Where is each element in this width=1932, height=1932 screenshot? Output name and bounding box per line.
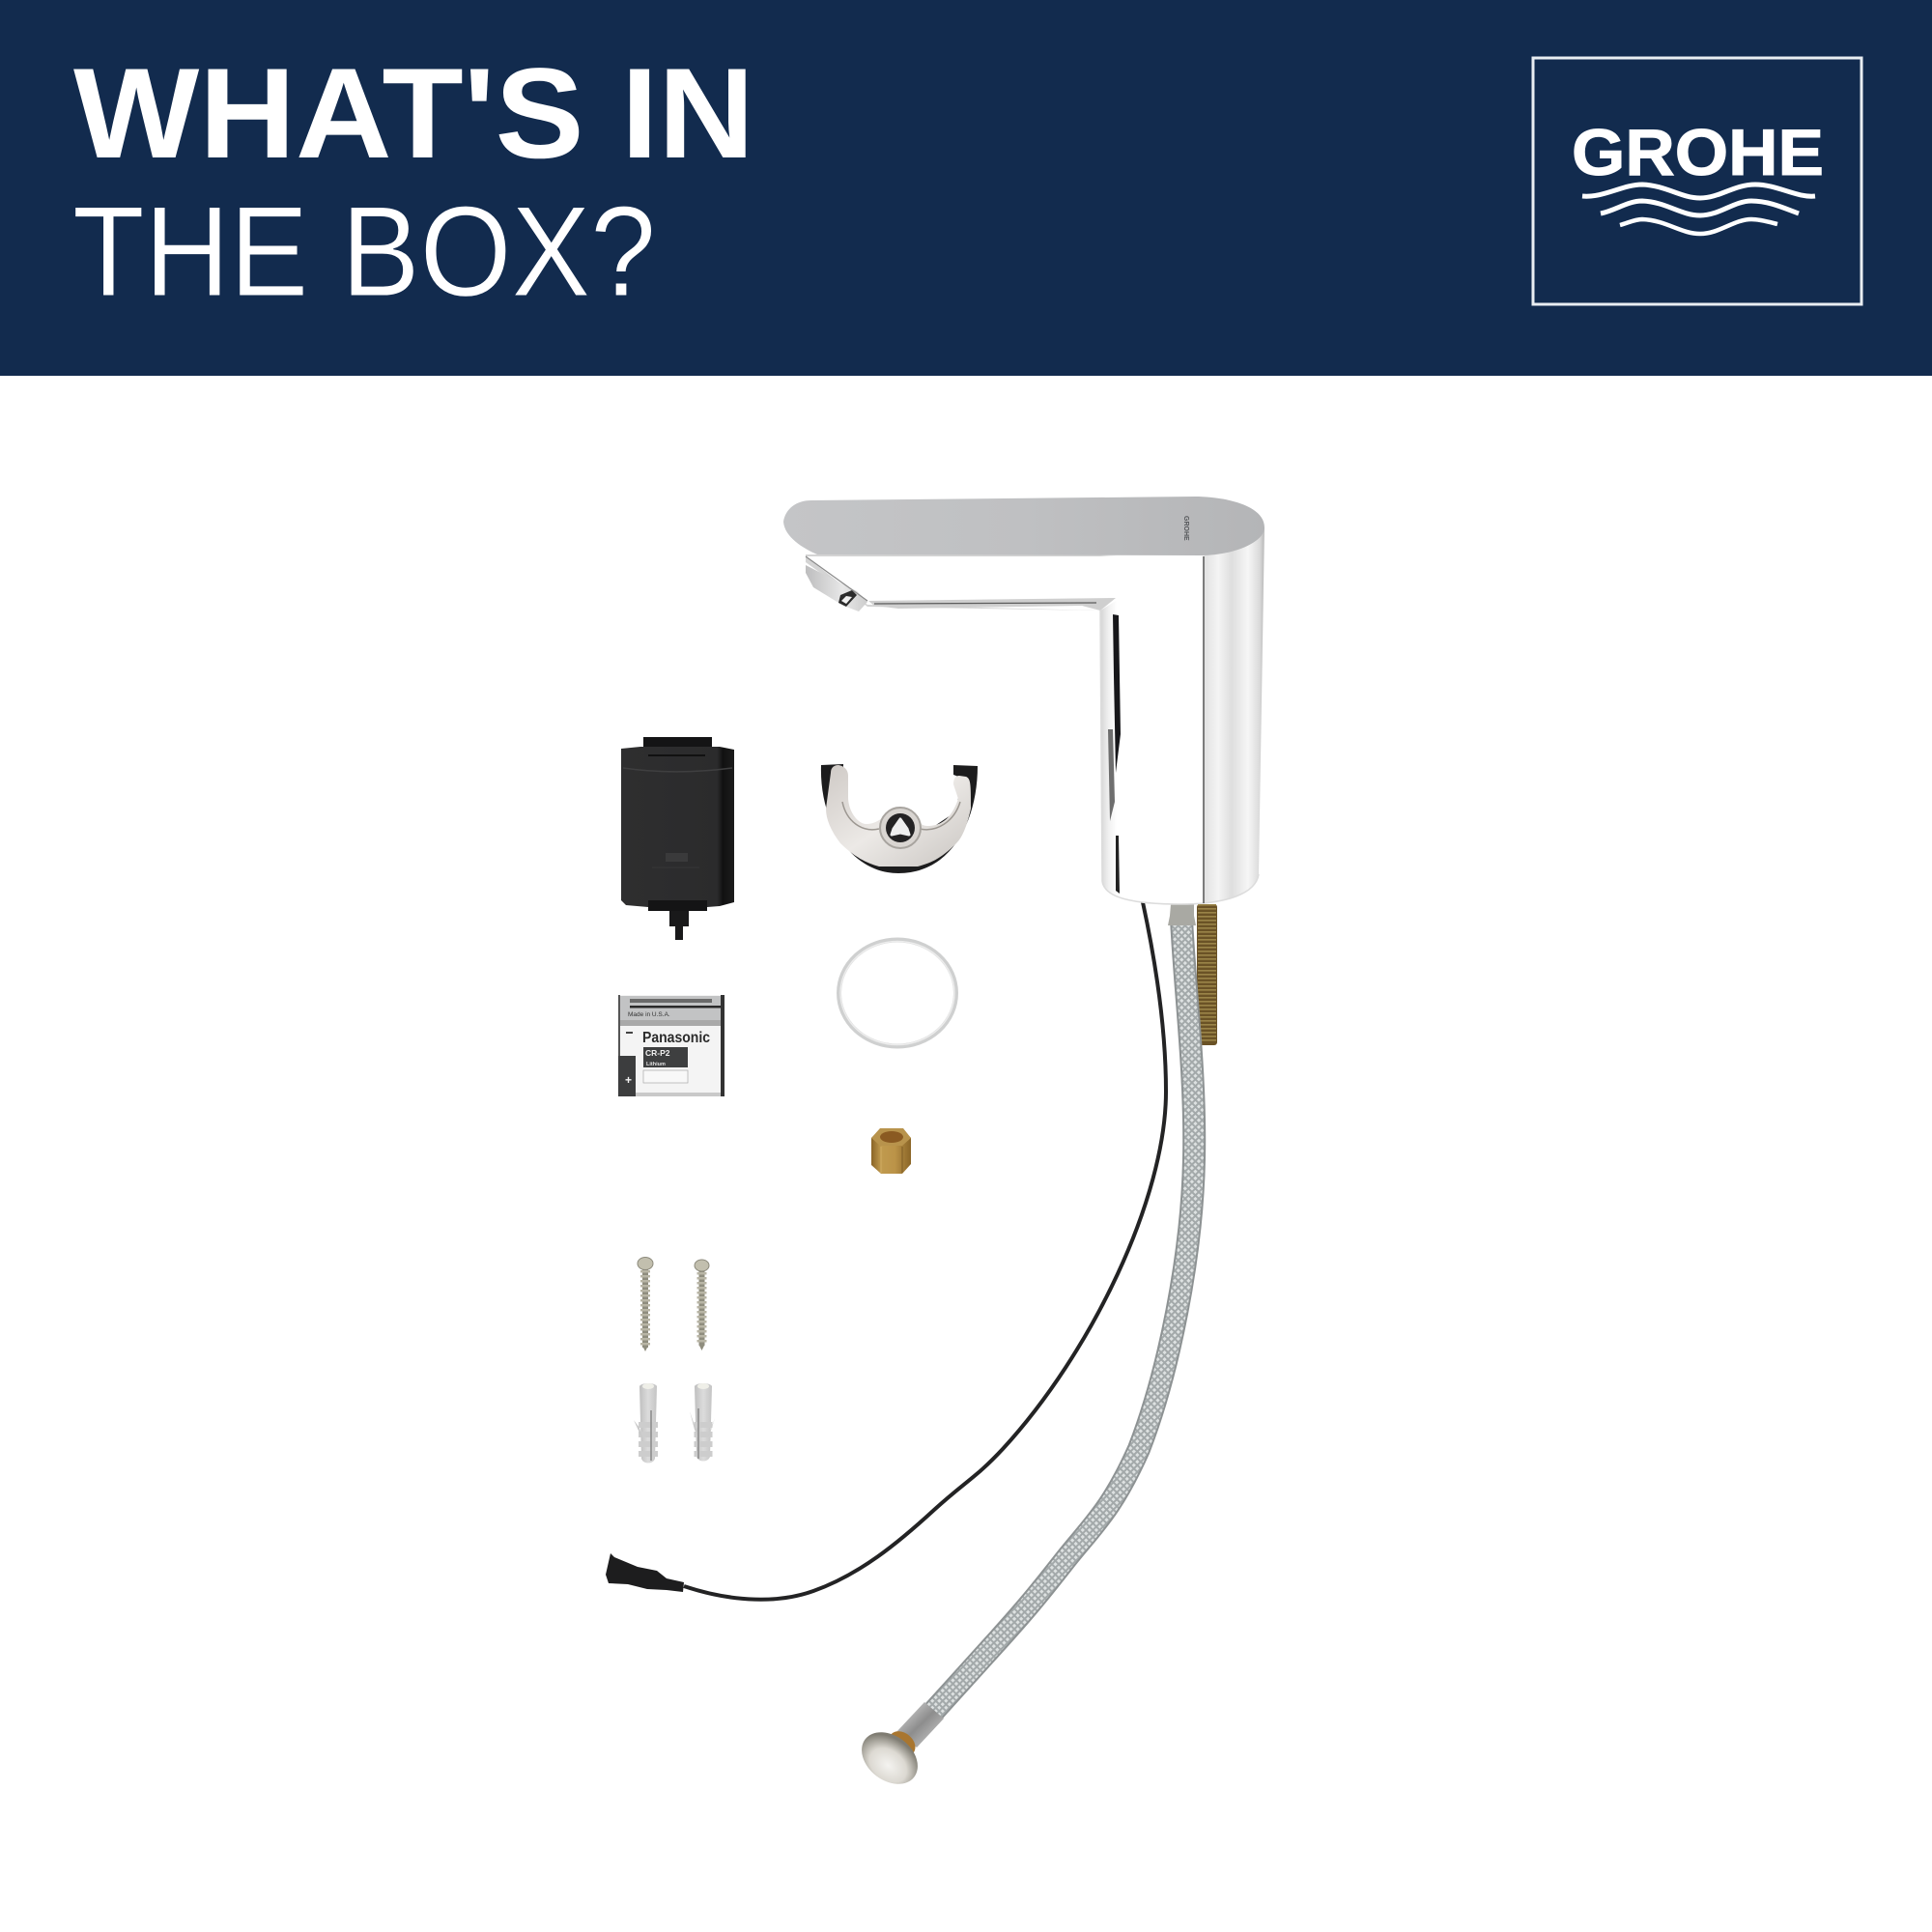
top surface	[783, 497, 1264, 555]
logo: GROHE	[1533, 58, 1861, 304]
small engraved logo: GROHE	[1182, 516, 1189, 541]
plug	[669, 911, 689, 940]
top fitting	[1168, 904, 1196, 925]
hub	[880, 808, 921, 848]
sensor cable with connector	[606, 902, 1166, 1600]
minus sign	[626, 1032, 633, 1034]
battery: Panasonic CR-P2: Lithium	[646, 1062, 666, 1067]
faucet	[783, 497, 1264, 904]
side edges	[618, 995, 620, 1096]
plus block	[618, 1056, 636, 1096]
title: THE BOX?	[72, 181, 656, 324]
screw left	[638, 1258, 653, 1351]
small label	[643, 1070, 688, 1083]
battery: Panasonic CR-P2: Made in U.S.A.	[628, 1011, 670, 1018]
column outer shading	[1100, 611, 1259, 904]
brass nut	[871, 1128, 911, 1174]
plug left	[634, 1383, 660, 1463]
battery pack housing	[621, 737, 734, 940]
metal plate	[826, 765, 971, 867]
brass seat	[884, 1726, 921, 1761]
bottom clip	[648, 900, 707, 911]
plate relief line	[842, 802, 960, 830]
column seam	[1203, 556, 1205, 903]
battery: Panasonic CR-P2: +	[625, 1073, 632, 1087]
column dark reflections	[1113, 614, 1121, 773]
faucet column and arm	[806, 527, 1264, 904]
arm underside reflections	[868, 598, 1116, 611]
screw right	[695, 1260, 709, 1350]
threaded rod	[1197, 904, 1217, 1045]
title: WHAT'S IN	[73, 43, 754, 185]
top band	[619, 996, 724, 1023]
model block	[643, 1047, 688, 1067]
sealing ring	[838, 940, 956, 1046]
connector plug	[606, 1553, 684, 1592]
braided hose	[852, 904, 1196, 1795]
brand name: Panasonic	[642, 1030, 710, 1046]
embossed mark	[652, 853, 699, 867]
aerator	[806, 565, 867, 611]
battery: Panasonic CR-P2: CR-P2	[645, 1048, 670, 1058]
end nut	[852, 1721, 927, 1795]
top clip	[643, 737, 712, 750]
plug right	[690, 1383, 715, 1461]
end collar	[896, 1702, 944, 1747]
title	[72, 43, 754, 324]
battery: Panasonic CR-P2	[618, 995, 724, 1096]
wall plugs	[634, 1383, 715, 1463]
wood screws	[638, 1258, 709, 1351]
housing body	[621, 747, 734, 907]
logo: GROHE: GROHE	[1572, 116, 1824, 189]
mounting bracket	[821, 764, 978, 873]
header banner	[0, 0, 1932, 376]
